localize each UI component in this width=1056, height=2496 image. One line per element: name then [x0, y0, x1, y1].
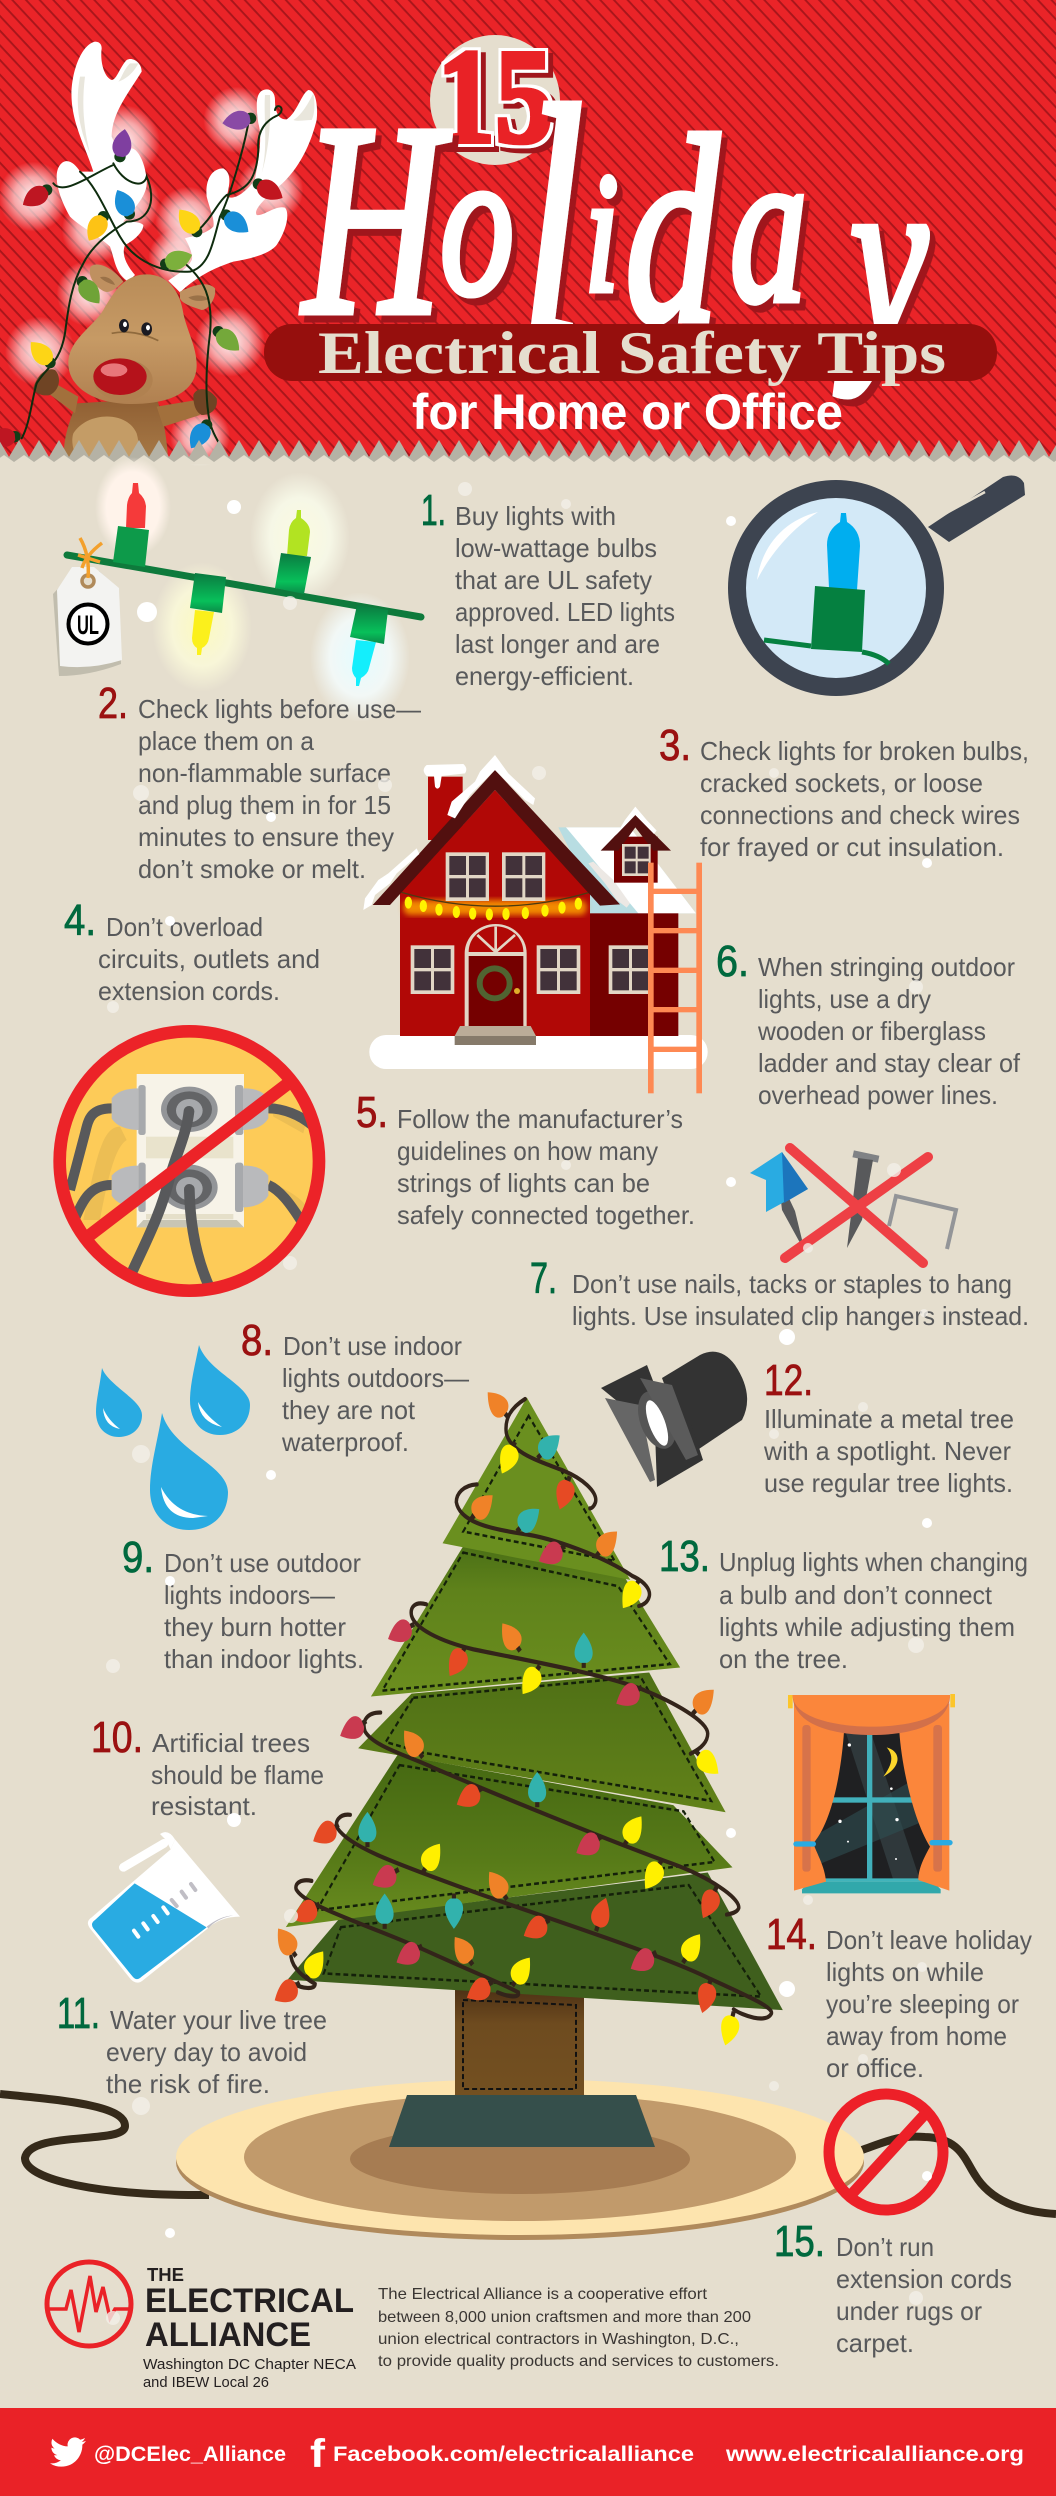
tip 9 number: 9.: [122, 1533, 154, 1582]
tip 12: use regular tree lights.: [764, 1468, 1013, 1498]
tree wire: [291, 1399, 772, 2018]
tip 11: [57, 1989, 327, 2099]
tip 2: Check lights before use—: [138, 694, 421, 724]
illustration: snowy red house with ladder: [363, 755, 708, 1093]
tip 9: lights indoors—: [164, 1580, 335, 1610]
tip 10: Artificial trees: [152, 1728, 310, 1758]
tip 3: connections and check wires: [700, 800, 1020, 830]
tip 6: wooden or fiberglass: [757, 1016, 986, 1046]
tip 9: they burn hotter: [164, 1612, 346, 1642]
twitter handle: @DCElec_Alliance: [94, 2443, 286, 2466]
tip 8: Don’t use indoor: [283, 1331, 462, 1361]
logo: The Electrical Alliance: and IBEW Local 26: [143, 2374, 269, 2391]
title: Holiday: l: [520, 39, 584, 405]
tip 14: lights on while: [826, 1957, 984, 1987]
footer bar: [0, 2408, 1056, 2496]
logo: The Electrical Alliance: ALLIANCE: [145, 2316, 311, 2354]
tip 13 number: 13.: [659, 1532, 710, 1581]
tip 11: every day to avoid: [106, 2037, 307, 2067]
tip 1: [421, 486, 675, 691]
tip 2: non-flammable surface: [138, 758, 391, 788]
tip 8: they are not: [282, 1395, 416, 1425]
tip 8 number: 8.: [241, 1316, 273, 1365]
tip 15 number: 15.: [774, 2217, 825, 2266]
tip 1: Buy lights with: [455, 501, 616, 531]
title number 15 with circle: 15: [437, 22, 553, 172]
front door: [455, 924, 536, 1045]
tip 5: [356, 1088, 695, 1230]
tree trunk and stand: [389, 1985, 655, 2147]
tip 15: under rugs or: [836, 2296, 982, 2326]
snowflakes: [106, 482, 932, 2325]
tip 14: away from home: [826, 2021, 1007, 2051]
UL tag: UL: [77, 610, 99, 640]
tip 6 number: 6.: [716, 937, 749, 986]
tip 10: should be flame: [151, 1760, 324, 1790]
string lights on house: [402, 892, 589, 920]
tip 10: resistant.: [151, 1791, 257, 1821]
tip 15: extension cords: [836, 2264, 1012, 2294]
about text: between 8,000 union craftsmen and more than 200: [378, 2309, 751, 2326]
tip 12: [763, 1356, 1014, 1498]
tip 12: Illuminate a metal tree: [764, 1404, 1014, 1434]
tip 7: [530, 1254, 1029, 1331]
tip 8: waterproof.: [281, 1427, 409, 1457]
tip 7 number: 7.: [530, 1254, 557, 1303]
tip 1: last longer and are: [455, 629, 660, 659]
subtitle pill: Electrical Safety Tips: Electrical Safety Tips: [318, 320, 946, 386]
tree tiers: [286, 1398, 783, 2010]
tip 5: safely connected together.: [397, 1200, 695, 1230]
tip 1 number: 1.: [421, 486, 446, 535]
title: Holiday: o: [440, 106, 514, 339]
UL tag: [53, 538, 122, 676]
tip 1: low-wattage bulbs: [455, 533, 657, 563]
tip 10: [91, 1713, 324, 1821]
tip 15: Don’t run: [836, 2232, 934, 2262]
tip 3: cracked sockets, or loose: [700, 768, 983, 798]
tip 6: ladder and stay clear of: [758, 1048, 1021, 1078]
tip 2: don’t smoke or melt.: [138, 854, 366, 884]
tip 13: Unplug lights when changing: [719, 1547, 1028, 1577]
tip 13: [659, 1532, 1028, 1674]
tip 11: Water your live tree: [110, 2005, 327, 2035]
facebook address: Facebook.com/electricalalliance: [333, 2443, 694, 2466]
title: Holiday: y: [834, 120, 928, 396]
tip 12: with a spotlight. Never: [763, 1436, 1011, 1466]
tip 13: on the tree.: [719, 1644, 848, 1674]
tip 2 number: 2.: [98, 679, 128, 728]
extension cords: [0, 2094, 1056, 2214]
tip 4: circuits, outlets and: [98, 944, 320, 974]
tip 7: lights. Use insulated clip hangers instead.: [572, 1301, 1029, 1331]
tip 2: place them on a: [138, 726, 315, 756]
tip 3 number: 3.: [659, 721, 691, 770]
illustration: water drops: [96, 1345, 250, 1530]
logo: The Electrical Alliance: Washington DC Chapter NECA: [143, 2356, 356, 2373]
torn paper edge: [0, 438, 1056, 464]
tip 11: the risk of fire.: [106, 2069, 270, 2099]
tip 13: lights while adjusting them: [719, 1612, 1015, 1642]
title: Holiday: H: [301, 68, 452, 372]
tip 4 number: 4.: [64, 896, 96, 945]
tip 9: [122, 1533, 364, 1674]
tip 1: that are UL safety: [455, 565, 652, 595]
tip 14 number: 14.: [766, 1910, 817, 1959]
tip 4: extension cords.: [98, 976, 280, 1006]
tip 12 number: 12.: [764, 1356, 813, 1405]
tip 14: or office.: [826, 2053, 924, 2083]
subtitle: for Home or Office: for Home or Office: [412, 384, 843, 440]
reindeer illustration with string lights: [0, 42, 317, 467]
tip 3: [659, 721, 1029, 862]
tip 1: energy-efficient.: [455, 661, 634, 691]
logo: The Electrical Alliance: THE: [147, 2265, 184, 2285]
header banner: [0, 0, 1056, 462]
tip 14: [766, 1910, 1032, 2083]
ladder: [648, 863, 702, 1093]
about text: to provide quality products and services to customers.: [378, 2353, 779, 2370]
tip 2: minutes to ensure they: [138, 822, 394, 852]
about text: union electrical contractors in Washington, D.C.,: [378, 2331, 739, 2348]
illustration: spotlight: [601, 1352, 747, 1487]
tip 2: [98, 679, 421, 884]
tip 8: lights outdoors—: [282, 1363, 469, 1393]
logo: The Electrical Alliance: ELECTRICAL: [145, 2282, 354, 2320]
icon: twitter bird: [50, 2437, 86, 2467]
tip 4: Don’t overload: [106, 912, 263, 942]
Christmas tree with lights: [270, 1385, 783, 2049]
tip 5: Follow the manufacturer’s: [397, 1104, 683, 1134]
tip 7: Don’t use nails, tacks or staples to hang: [572, 1269, 1012, 1299]
illustration: crossed-out tack, nail and staple: [750, 1148, 956, 1263]
tip 6: lights, use a dry: [758, 984, 931, 1014]
tip 5: guidelines on how many: [397, 1136, 658, 1166]
rug under tree: [176, 2079, 864, 2240]
prohibition sign over cord: [829, 2094, 943, 2210]
illustration: measuring cup of water: [88, 1832, 240, 1983]
tip 15: [774, 2217, 1012, 2358]
tip 15: carpet.: [836, 2328, 914, 2358]
illustration: night window with curtains: [788, 1694, 955, 1893]
tip 5: strings of lights can be: [397, 1168, 650, 1198]
tip 9: than indoor lights.: [164, 1644, 364, 1674]
title: Holiday: i: [585, 138, 618, 327]
tip 11 number: 11.: [57, 1989, 100, 2038]
logo icon: circle with pulse: [46, 2262, 133, 2346]
tip 1: approved. LED lights: [455, 597, 675, 627]
illustration: magnifying glass over bulb: [737, 475, 1025, 687]
dormer: [601, 807, 671, 883]
about text: [378, 2286, 779, 2370]
logo: The Electrical Alliance: [46, 2262, 356, 2391]
title: Holiday: d: [625, 82, 720, 379]
tip 14: Don’t leave holiday: [826, 1925, 1032, 1955]
tip 3: Check lights for broken bulbs,: [700, 736, 1029, 766]
illustration: overloaded outlet with prohibition sign: [60, 1031, 319, 1291]
tip 6: overhead power lines.: [758, 1080, 998, 1110]
tip 8: [241, 1316, 469, 1457]
tree bulbs: [270, 1385, 743, 2049]
tip 2: and plug them in for 15: [138, 790, 391, 820]
tip 3: for frayed or cut insulation.: [700, 832, 1004, 862]
tip 4: [64, 896, 320, 1006]
tip 13: a bulb and don’t connect: [719, 1580, 993, 1610]
website: www.electricalalliance.org: [725, 2443, 1024, 2466]
tip 6: When stringing outdoor: [758, 952, 1015, 982]
about text: The Electrical Alliance is a cooperative effort: [378, 2286, 708, 2303]
tip 5 number: 5.: [356, 1088, 388, 1137]
tip 10 number: 10.: [91, 1713, 143, 1762]
illustration: string of mini lights with UL tag: [53, 457, 421, 722]
title: Holiday: a: [730, 105, 807, 349]
tip 9: Don’t use outdoor: [164, 1548, 361, 1578]
tip 6: [716, 937, 1021, 1110]
tip 14: you’re sleeping or: [826, 1989, 1019, 2019]
icon: facebook f: f: [310, 2432, 326, 2476]
